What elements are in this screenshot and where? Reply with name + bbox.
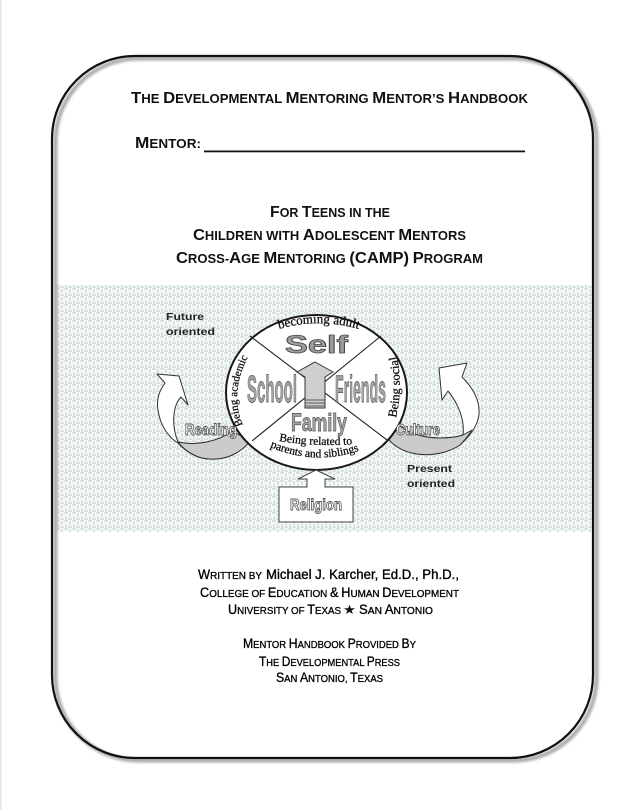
patterned band bbox=[55, 285, 592, 532]
publisher credits: THE DEVELOPMENTAL PRESS bbox=[259, 654, 400, 669]
label: future oriented: oriented bbox=[166, 326, 215, 338]
title: THE DEVELOPMENTAL MENTORING MENTOR’S HANDBOOK bbox=[131, 90, 528, 107]
diagram: developmental wheel bbox=[156, 311, 480, 522]
arrow: culture curve bbox=[386, 363, 479, 455]
label: future oriented bbox=[166, 311, 215, 338]
label: becoming adult: becoming adult bbox=[276, 315, 360, 329]
label: being related to parents and siblings bbox=[269, 433, 358, 458]
author credits: ★ bbox=[343, 603, 356, 618]
rounded frame bbox=[52, 56, 596, 760]
mentor name line: MENTOR: bbox=[135, 135, 201, 152]
label: culture: Culture bbox=[396, 422, 440, 439]
publisher credits: MENTOR HANDBOOK PROVIDED BY bbox=[243, 636, 416, 651]
label: being related to parents and siblings: Being related to bbox=[279, 433, 352, 447]
label: family: Family bbox=[291, 409, 347, 437]
subtitle: CROSS-AGE MENTORING (CAMP) PROGRAM bbox=[176, 250, 483, 267]
page edge strip bbox=[0, 0, 2, 810]
label: self: Self bbox=[285, 331, 349, 359]
subtitle: CHILDREN WITH ADOLESCENT MENTORS bbox=[193, 227, 466, 244]
label: present oriented: oriented bbox=[407, 478, 455, 490]
diagram: developmental wheel: Friends bbox=[335, 369, 386, 411]
diagram: developmental wheel: School bbox=[247, 369, 297, 411]
arrow: centre up arrow bbox=[297, 362, 333, 408]
label: present oriented bbox=[407, 463, 455, 490]
publisher credits: SAN ANTONIO, TEXAS bbox=[276, 670, 383, 685]
author credits bbox=[198, 567, 460, 618]
author credits: SAN ANTONIO bbox=[359, 602, 433, 617]
subtitle bbox=[176, 204, 483, 267]
wheel dividers bbox=[250, 336, 387, 441]
label: future oriented: Future bbox=[166, 311, 204, 323]
label: being related to parents and siblings: parents and siblings bbox=[269, 442, 358, 458]
religion box with arrow bbox=[279, 470, 353, 522]
label: reading: Reading bbox=[185, 422, 237, 439]
religion box with arrow: Religion bbox=[290, 497, 342, 514]
author credits: Michael J. Karcher, Ed.D., Ph.D., bbox=[266, 567, 459, 582]
publisher credits bbox=[243, 636, 416, 685]
author credits: COLLEGE OF EDUCATION & HUMAN DEVELOPMENT bbox=[200, 585, 460, 600]
arrow: reading curve bbox=[157, 374, 250, 459]
wheel circle bbox=[226, 315, 407, 470]
subtitle: FOR TEENS IN THE bbox=[270, 204, 390, 221]
label: being academic: Being academic bbox=[231, 355, 248, 426]
label: being social: Being social bbox=[388, 356, 402, 418]
label: present oriented: Present bbox=[407, 463, 453, 475]
author credits: WRITTEN BY bbox=[198, 567, 262, 582]
author credits: UNIVERSITY OF TEXAS bbox=[228, 602, 341, 617]
